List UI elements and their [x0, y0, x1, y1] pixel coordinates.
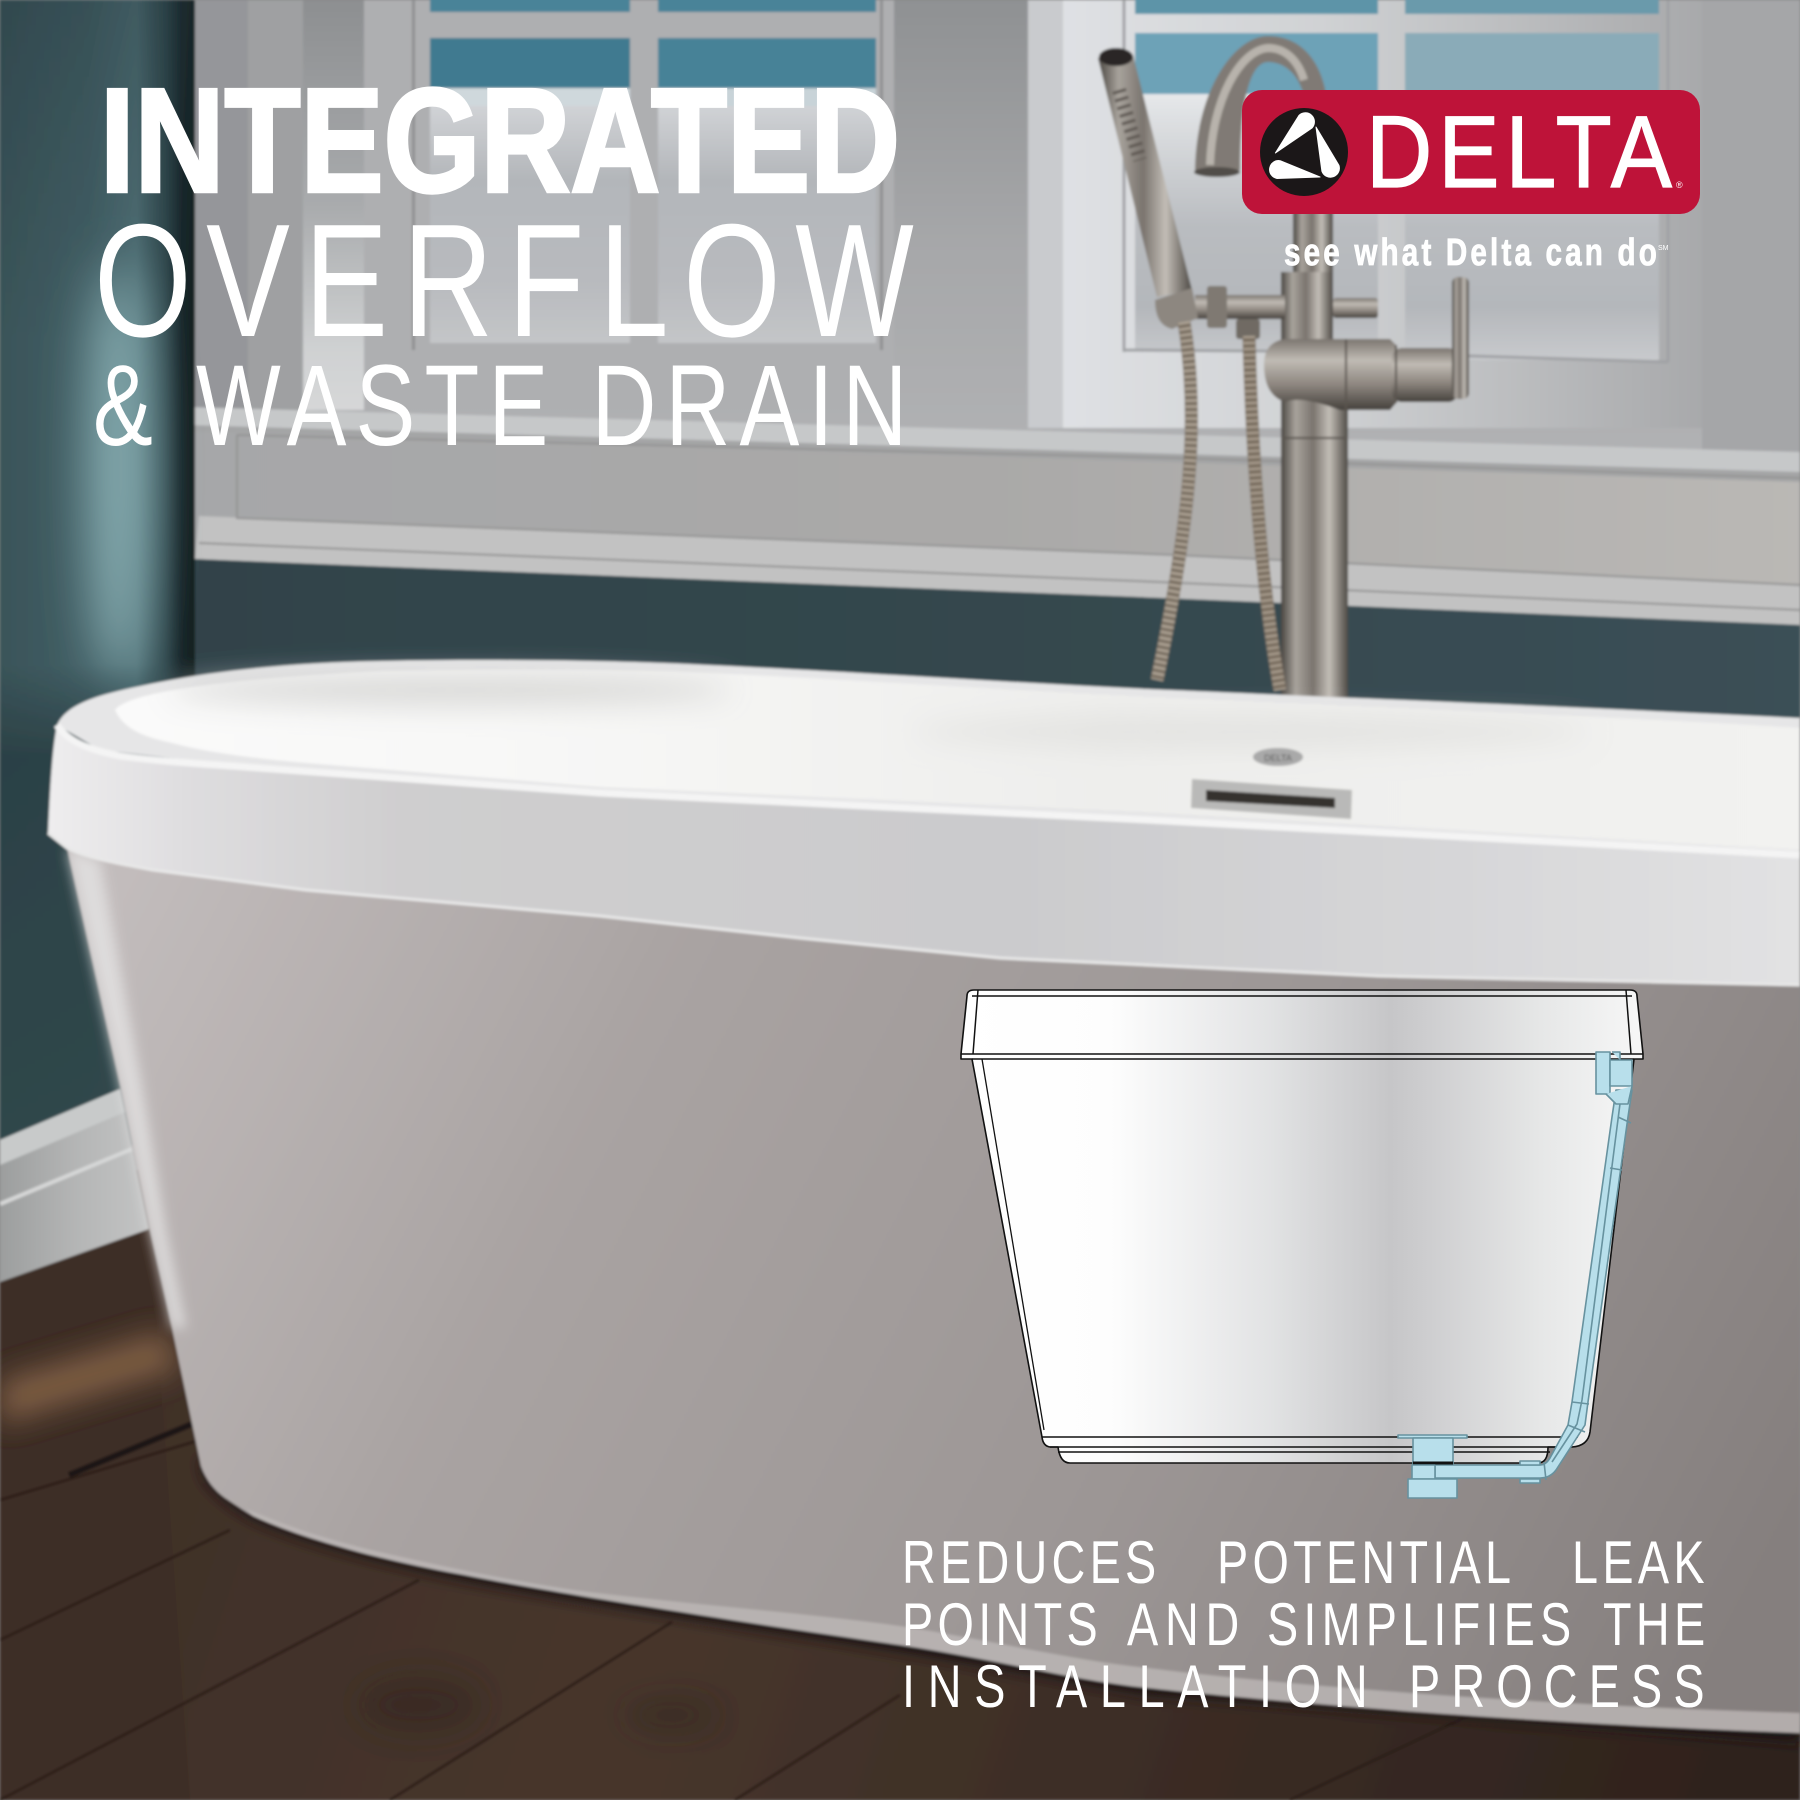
- bathtub: [48, 660, 1800, 1742]
- caption: [902, 1529, 1705, 1720]
- caption line 1: POTENTIAL: [1217, 1529, 1511, 1596]
- teal wall band: [195, 559, 1800, 840]
- tub shadow on floor: [200, 1460, 1800, 1742]
- caption line 2: POINTS: [902, 1591, 1098, 1658]
- valve: [1264, 339, 1396, 410]
- diverter knob: [1333, 298, 1378, 318]
- caption line 3: INSTALLATION: [902, 1653, 1368, 1720]
- caption line 2: SIMPLIFIES: [1267, 1591, 1571, 1658]
- cradle: [1155, 288, 1198, 329]
- shower arm: [1195, 295, 1285, 319]
- rim front: [48, 725, 1800, 985]
- drain outlet: [1408, 1479, 1457, 1498]
- service mark: SM: [1658, 245, 1669, 252]
- caption line 1: REDUCES: [902, 1529, 1156, 1596]
- logo badge: [1242, 90, 1700, 214]
- drain body: [1412, 1465, 1435, 1479]
- caption line 2: [902, 1591, 1705, 1658]
- tub badge: [1253, 748, 1303, 766]
- caption line 2: THE: [1603, 1591, 1705, 1658]
- tub left edge highlight: [67, 848, 186, 1328]
- caption line 1: LEAK: [1572, 1529, 1705, 1596]
- heading line 2: OVERFLOW: [94, 190, 914, 371]
- caption line 3: PROCESS: [1409, 1653, 1705, 1720]
- baseboard: [0, 1089, 149, 1282]
- hand shower: [1098, 55, 1192, 297]
- tub badge: DELTA: [1264, 753, 1292, 763]
- Delta logo: [1242, 90, 1700, 274]
- wall and window trim: [194, 0, 1800, 640]
- drain cup: [1398, 1435, 1467, 1438]
- lever: [1452, 277, 1469, 399]
- faucet: [1098, 36, 1469, 715]
- overflow pipe run: [1435, 1090, 1632, 1478]
- caption line 3: [902, 1653, 1705, 1720]
- pipe collar: [1520, 1461, 1540, 1465]
- drain and overflow pipe: [1398, 1052, 1632, 1498]
- caption line 1: [902, 1529, 1705, 1596]
- spout: [1195, 36, 1327, 174]
- tagline: see what Delta can do: [1284, 232, 1657, 274]
- logo wordmark: DELTA: [1366, 94, 1672, 209]
- tub shell: [961, 990, 1643, 1463]
- heading: [93, 58, 914, 470]
- registered mark: ®: [1676, 180, 1683, 190]
- heading line 3: & WASTE DRAIN: [93, 341, 907, 470]
- left window: [364, 0, 894, 410]
- hose connector: [1236, 319, 1260, 339]
- tub top surface: [57, 660, 1800, 860]
- floor: [0, 1170, 1800, 1800]
- neck: [1293, 100, 1333, 275]
- overflow plate: [1191, 779, 1352, 819]
- right window: [1063, 0, 1702, 428]
- hoses: [1157, 322, 1191, 680]
- riser: [1281, 395, 1348, 715]
- caption line 2: AND: [1127, 1591, 1239, 1658]
- tub cross-section diagram: [961, 990, 1643, 1498]
- upper body: [1281, 272, 1333, 402]
- tub body: [67, 848, 1800, 1733]
- basin interior: [115, 670, 1800, 850]
- basin shading: [170, 674, 730, 706]
- overflow fitting: [1596, 1052, 1610, 1094]
- tub base lip: [247, 1509, 1800, 1733]
- heading line 1: INTEGRATED: [100, 58, 900, 224]
- rim bottom highlight: [48, 833, 1800, 985]
- logo emblem: [1260, 108, 1348, 196]
- left wall curtain: [0, 0, 195, 1145]
- window sill and apron: [186, 407, 1800, 626]
